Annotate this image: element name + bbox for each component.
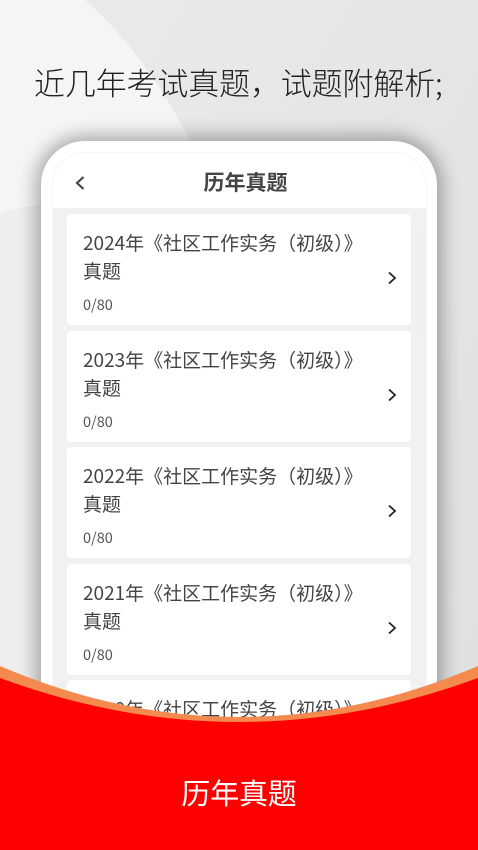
icon: chevron [388,388,396,402]
icon: chevron [388,622,396,634]
exam card 2024: 2024年《社区工作实务（初级）》 [83,229,363,256]
exam card 2020 [67,680,411,791]
phone screen [53,153,426,781]
exam card 2022: 2022年《社区工作实务（初级）》 [83,462,363,489]
exam card 2023: 真题 [83,374,121,401]
exam card 2020: 真题 [83,723,121,750]
phone mockup [41,141,437,781]
exam card 2021 [67,564,411,675]
exam card 2024 [67,214,411,325]
headline: 近几年考试真题，试题附解析; [34,59,443,104]
red curved footer [0,666,478,850]
icon: chevron [388,272,396,284]
exam card 2024: 0/80 [83,294,113,315]
exam card 2023: 0/80 [83,411,113,432]
exam card 2022 [67,447,411,558]
exam card 2020: 2020年《社区工作实务（初级）》 [83,695,363,722]
icon: back arrow [76,176,84,190]
exam card 2021: 2021年《社区工作实务（初级）》 [83,579,363,606]
icon: chevron [388,504,396,518]
exam card 2022: 0/80 [83,527,113,548]
page title: 历年真题 [204,167,288,197]
footer label: 历年真题 [181,771,297,813]
side button ghost [418,235,427,337]
exam card 2024: 真题 [83,257,121,284]
exam card 2023: 2023年《社区工作实务（初级）》 [83,346,363,373]
exam card 2022: 真题 [83,490,121,517]
app header [53,153,426,208]
exam card 2023 [67,331,411,442]
exam card 2021: 0/80 [83,644,113,665]
exam card 2021: 真题 [83,607,121,634]
